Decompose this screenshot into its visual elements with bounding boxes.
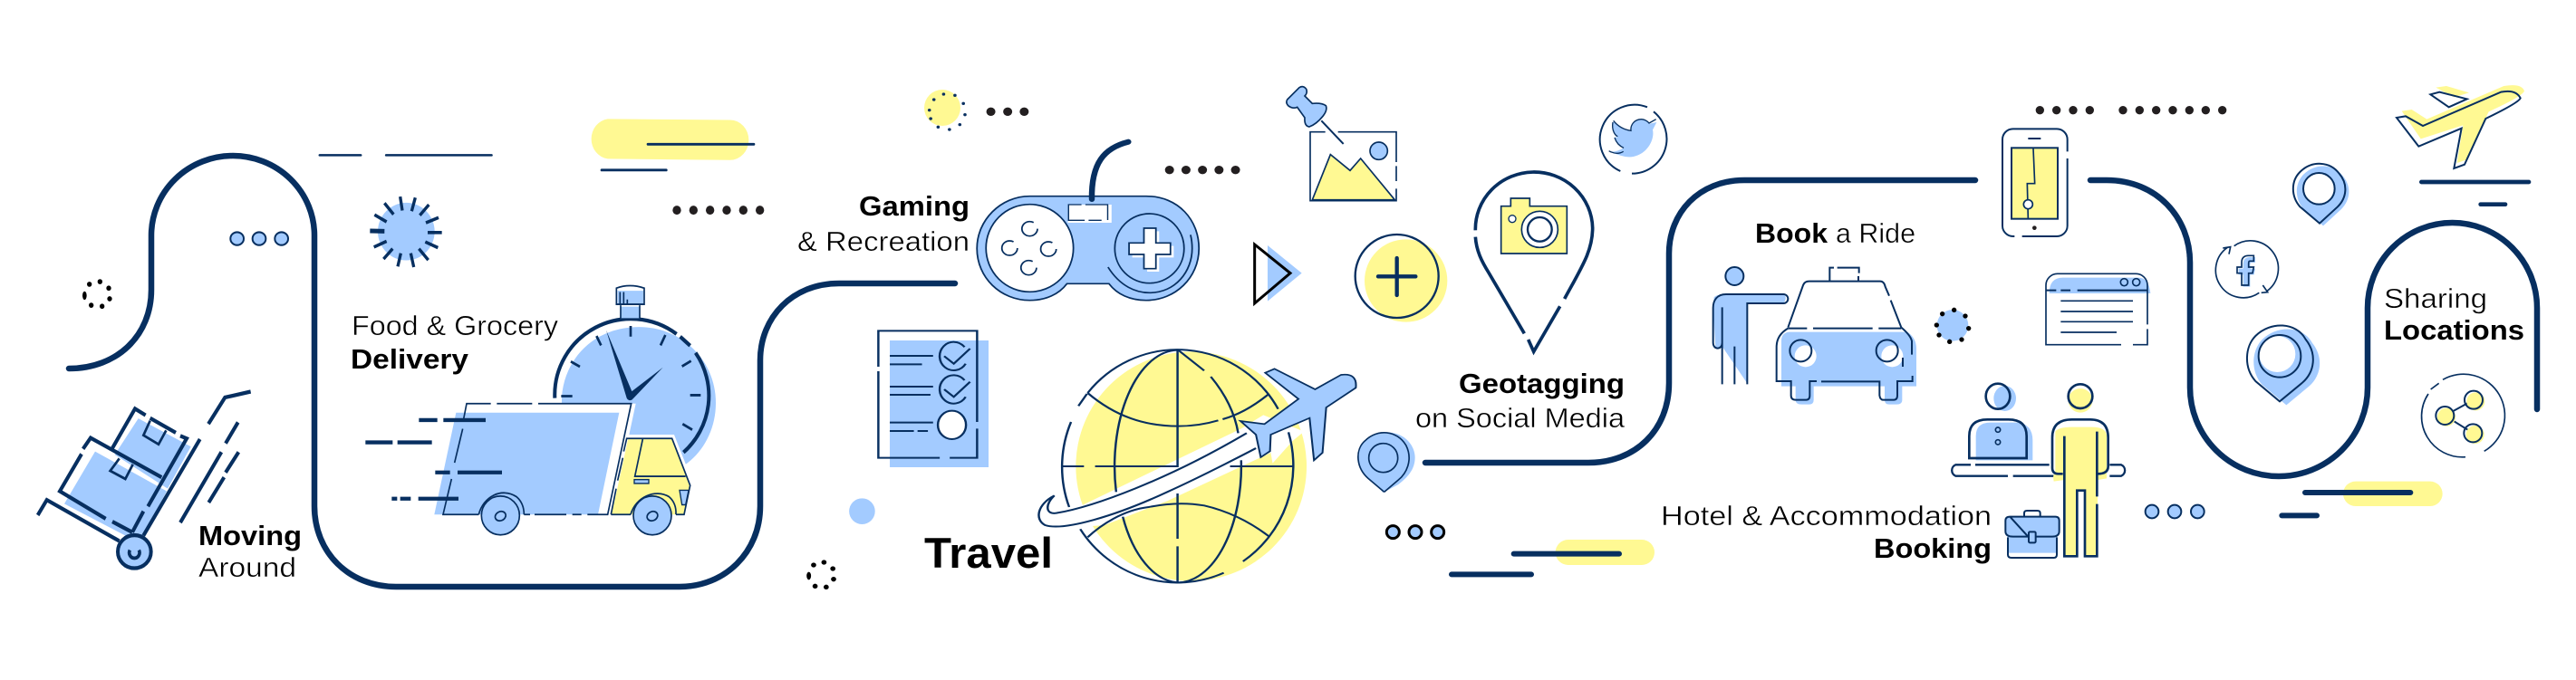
label: Gaming & Recreation <box>797 190 970 257</box>
label: Travel: Travel <box>924 529 1053 577</box>
dotted ring <box>82 279 112 309</box>
label: Hotel & Accommodation Booking: Booking <box>1874 532 1992 564</box>
label: Sharing Locations <box>2384 283 2524 346</box>
label: Moving Around: Moving <box>198 520 302 551</box>
label: Book a Ride: a Ride <box>1836 217 1915 249</box>
speed lines <box>365 420 502 499</box>
icon: briefcase <box>2005 511 2060 558</box>
icon: globe with plane <box>1034 350 1356 582</box>
icon: stopwatch <box>555 286 716 465</box>
label: Book a Ride <box>1755 217 1915 249</box>
icon: blue burst <box>370 196 442 267</box>
label: Hotel & Accommodation Booking <box>1661 500 1992 564</box>
icon: plus circle <box>1356 235 1447 322</box>
label: Sharing Locations: Locations <box>2384 314 2524 346</box>
icon: location pin upper <box>2293 164 2349 225</box>
icon: share circle <box>2422 374 2504 457</box>
icon: location pin lower <box>2247 325 2320 405</box>
label: Moving Around <box>198 520 302 583</box>
label: Moving Around: Around <box>198 551 296 583</box>
icon: delivery truck <box>434 404 694 535</box>
icon: hand truck with boxes <box>38 391 251 568</box>
dotted ring <box>806 560 836 589</box>
blue dot <box>849 498 875 524</box>
icon: pushpin and picture <box>1287 87 1396 201</box>
three blue dots <box>2146 505 2205 518</box>
label: Food & Grocery Delivery: Delivery <box>351 343 469 375</box>
six black dots <box>672 206 764 215</box>
icon: facebook refresh circle <box>2215 241 2278 298</box>
five black dots <box>1165 166 1240 174</box>
yellow pill with lines <box>1452 540 1655 574</box>
icon: taxi <box>1777 268 1916 405</box>
blue dotted circle <box>1934 308 1971 344</box>
label: Geotagging on Social Media: on Social Media <box>1415 402 1626 434</box>
winding route line: third section <box>2090 180 2537 476</box>
icon: browser window <box>2046 273 2150 345</box>
icon: play triangle <box>1255 244 1302 303</box>
icon: hotel reception <box>1952 384 2125 556</box>
label: Book a Ride: Book <box>1755 217 1828 249</box>
icon: twitter circle <box>1600 105 1666 174</box>
yellow pill with lines <box>2282 482 2443 515</box>
icon: person hailing <box>1713 267 1788 384</box>
label: Hotel & Accommodation Booking: Hotel & Accommodation <box>1661 500 1992 532</box>
icon: map pin with camera <box>1475 172 1593 351</box>
yellow circle with dots <box>924 90 967 131</box>
three black dots <box>987 108 1028 116</box>
icon: smartphone with map <box>2002 129 2068 236</box>
icon: small location pin <box>1358 432 1415 493</box>
icon: game controller <box>977 142 1199 301</box>
label: Gaming & Recreation: & Recreation <box>797 225 970 257</box>
yellow pill with lines <box>592 119 754 170</box>
runway lines <box>2421 182 2529 205</box>
three outlined blue dots <box>1386 526 1444 539</box>
eleven black dots <box>2036 106 2226 114</box>
label: Food & Grocery Delivery: Food & Grocery <box>352 310 559 341</box>
icon: airplane taking off <box>2397 85 2524 168</box>
label: Sharing Locations: Sharing <box>2384 283 2487 314</box>
decorative top lines <box>320 152 492 158</box>
winding route line: second section <box>1425 180 1975 463</box>
winding route line: first section <box>69 156 955 587</box>
label: Geotagging on Social Media <box>1415 368 1626 434</box>
label: Gaming & Recreation: Gaming <box>859 190 970 222</box>
three blue dots <box>230 232 288 245</box>
icon: checklist <box>878 330 989 467</box>
label: Food & Grocery Delivery <box>351 310 559 375</box>
label: Geotagging on Social Media: Geotagging <box>1459 368 1625 399</box>
